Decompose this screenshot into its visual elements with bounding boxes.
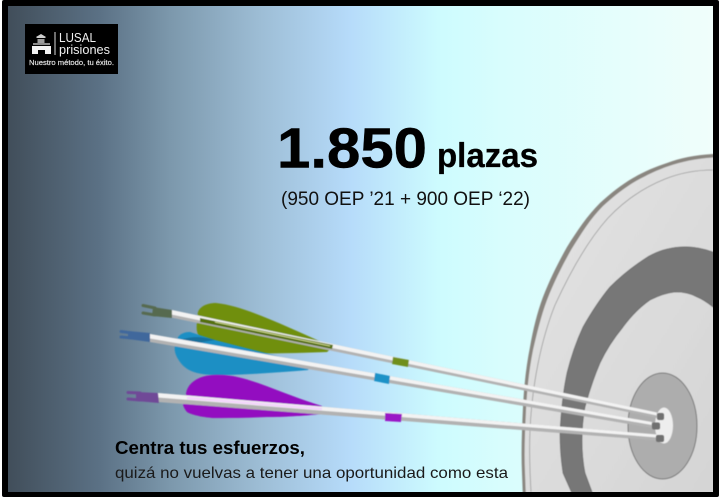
green band	[392, 357, 409, 367]
logo wordmark: LUSAL	[59, 31, 96, 45]
arrow tips	[652, 413, 664, 442]
heading: number of places: 1.850	[277, 116, 427, 180]
bullseye ring	[628, 373, 697, 479]
bullseye centre	[655, 408, 673, 444]
green vane line	[200, 318, 333, 349]
purple shaft	[158, 393, 657, 440]
purple fletching	[183, 375, 323, 418]
subheading: breakdown: (950 OEP ’21 + 900 OEP ‘22)	[281, 189, 530, 210]
dark target ring	[560, 247, 722, 500]
green shaft	[171, 310, 657, 418]
arrow: blue	[121, 331, 652, 428]
blue fletching	[175, 332, 312, 375]
logo: LUSAL prisiones: prisiones	[59, 42, 110, 57]
slogan: quizá no vuelvas a tener una oportunidad como esta	[115, 465, 508, 482]
heading: number of places	[277, 116, 538, 180]
thin ring line on board	[530, 170, 713, 492]
green fletching	[197, 303, 333, 353]
slogan	[115, 438, 508, 482]
target board	[522, 154, 722, 500]
logo: LUSAL prisiones	[25, 24, 118, 74]
blue shaft	[150, 334, 652, 428]
icon: prison building	[32, 34, 51, 54]
green nock	[143, 306, 172, 318]
logo tagline: Nuestro método, tu éxito.	[29, 58, 114, 67]
arrow: purple	[128, 375, 657, 440]
purple nock	[128, 392, 159, 403]
slogan: Centra tus esfuerzos,	[115, 438, 305, 458]
purple band	[385, 413, 402, 422]
heading: number of places: plazas	[437, 137, 538, 175]
blue nock	[121, 331, 150, 342]
arrow: green	[143, 303, 657, 418]
blue band	[374, 373, 390, 384]
